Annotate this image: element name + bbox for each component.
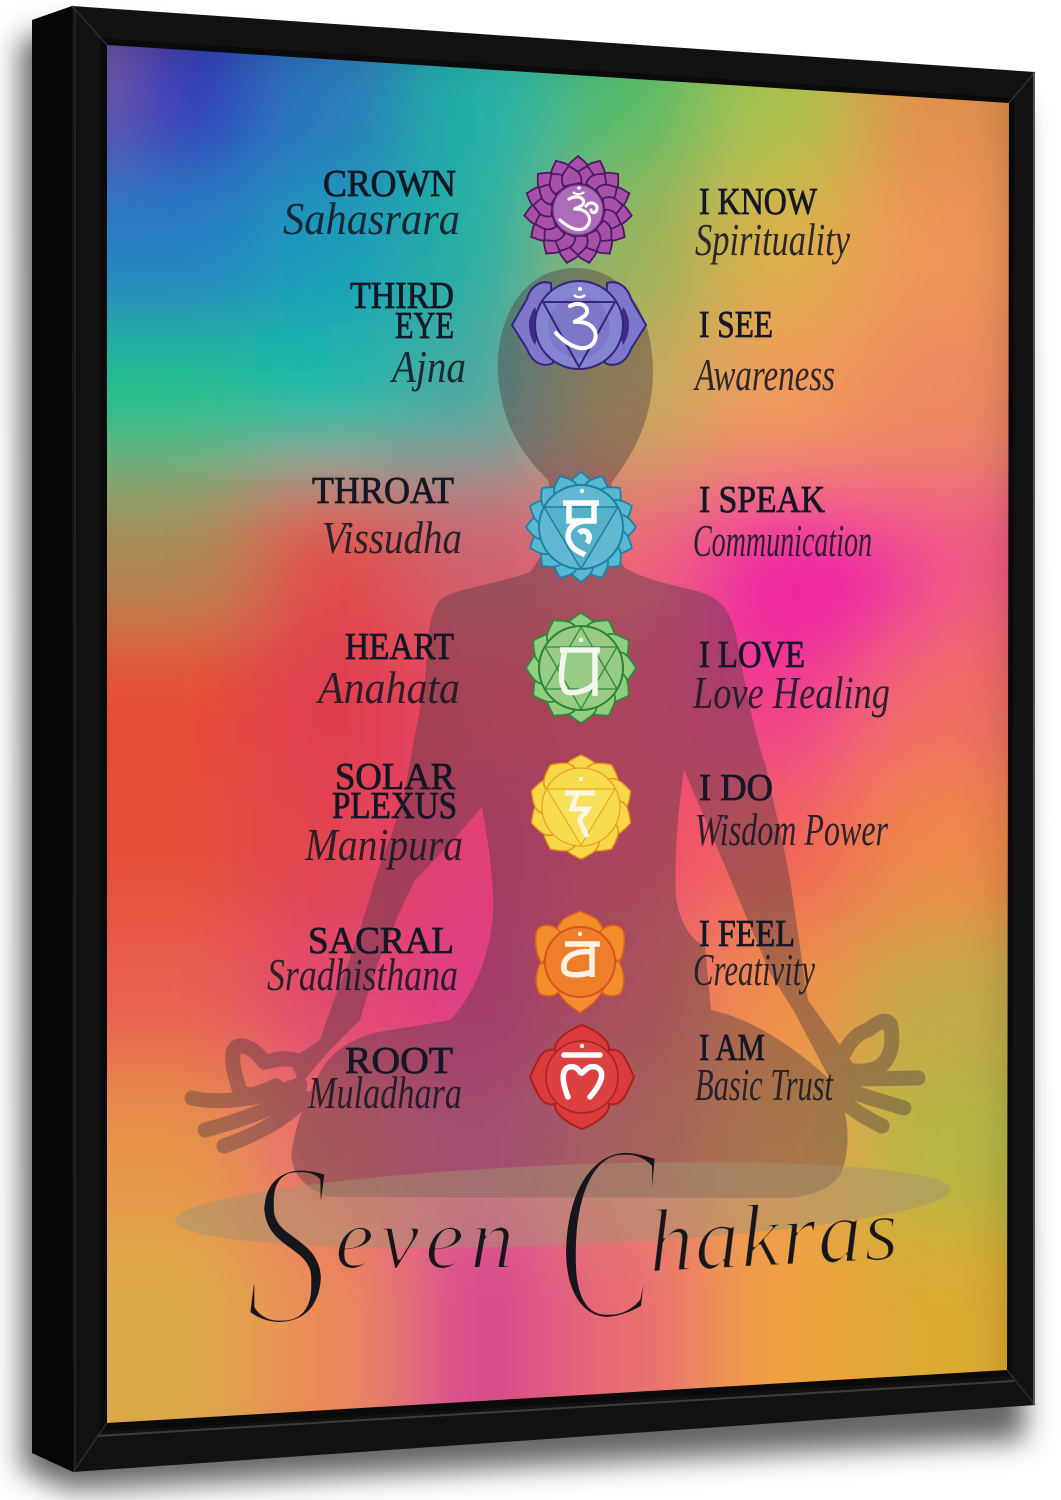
label: root: Muladhara xyxy=(307,1067,462,1118)
meditating figure silhouette xyxy=(192,268,918,1198)
title: Seven Chakras: hakras xyxy=(646,1180,902,1292)
affirmation: I am xyxy=(695,1027,834,1110)
left hand xyxy=(192,1046,305,1146)
chakra: root xyxy=(530,1025,634,1129)
label: crown: Sahasrara xyxy=(283,193,460,244)
affirmation: I love: I LOVE xyxy=(699,634,805,676)
label: sacral: SACRAL xyxy=(308,920,454,962)
affirmation: I speak: Communication xyxy=(693,515,872,566)
label: heart: Anahata xyxy=(315,662,460,713)
body xyxy=(290,268,852,1198)
ground shadow mat xyxy=(174,1149,952,1261)
affirmation: I speak xyxy=(693,479,872,566)
label: solar plexus xyxy=(304,756,463,870)
label: third eye: Ajna xyxy=(389,341,466,392)
label: solar plexus: Manipura xyxy=(304,819,463,870)
label: third eye: EYE xyxy=(395,305,454,347)
affirmation: I am: I AM xyxy=(699,1027,765,1069)
label: root: ROOT xyxy=(345,1040,453,1082)
chakra: sacral xyxy=(536,911,624,1013)
affirmation: I know: I KNOW xyxy=(699,181,817,223)
chakra: crown xyxy=(523,156,633,265)
label: throat xyxy=(312,470,462,563)
affirmation: I do xyxy=(695,767,889,855)
title: Seven Chakras: C xyxy=(555,1092,656,1375)
affirmation: I feel xyxy=(693,913,815,995)
chakra: throat xyxy=(525,471,637,583)
affirmation: I know xyxy=(695,181,850,265)
affirmation: I know: Spirituality xyxy=(695,214,850,265)
right hand xyxy=(842,1021,918,1126)
title: Seven Chakras: even xyxy=(335,1191,520,1288)
affirmation: I see: Awareness xyxy=(693,349,835,400)
chakra: solar plexus xyxy=(526,754,636,860)
affirmation: I am: Basic Trust xyxy=(695,1059,834,1110)
label: solar plexus: PLEXUS xyxy=(332,785,457,827)
chakra: third eye xyxy=(512,281,646,369)
affirmation: I do: I DO xyxy=(699,767,773,809)
label: crown: CROWN xyxy=(323,163,456,205)
label: crown xyxy=(283,163,460,244)
affirmation: I love xyxy=(692,634,890,718)
label: third eye: THIRD xyxy=(350,275,454,317)
rainbow gradient canvas xyxy=(107,45,1009,1423)
affirmation: I see xyxy=(693,304,835,400)
affirmation: I see: I SEE xyxy=(699,304,773,346)
label: third eye xyxy=(350,275,466,392)
label: heart: HEART xyxy=(345,626,454,668)
affirmation: I do: Wisdom Power xyxy=(695,804,889,855)
label: throat: THROAT xyxy=(312,470,454,512)
label: heart xyxy=(315,626,460,713)
affirmation: I love: Love Healing xyxy=(692,667,890,718)
title: Seven Chakras xyxy=(245,1092,902,1376)
label: sacral xyxy=(267,920,458,1000)
label: root xyxy=(307,1040,462,1118)
label: sacral: Sradhisthana xyxy=(267,949,458,1000)
affirmation: I feel: Creativity xyxy=(693,944,815,995)
chakra: heart xyxy=(525,612,637,724)
affirmation: I feel: I FEEL xyxy=(699,913,795,955)
title: Seven Chakras: S xyxy=(245,1114,330,1376)
affirmation: I speak: I SPEAK xyxy=(699,479,825,521)
label: solar plexus: SOLAR xyxy=(335,756,456,798)
label: throat: Vissudha xyxy=(322,512,462,563)
